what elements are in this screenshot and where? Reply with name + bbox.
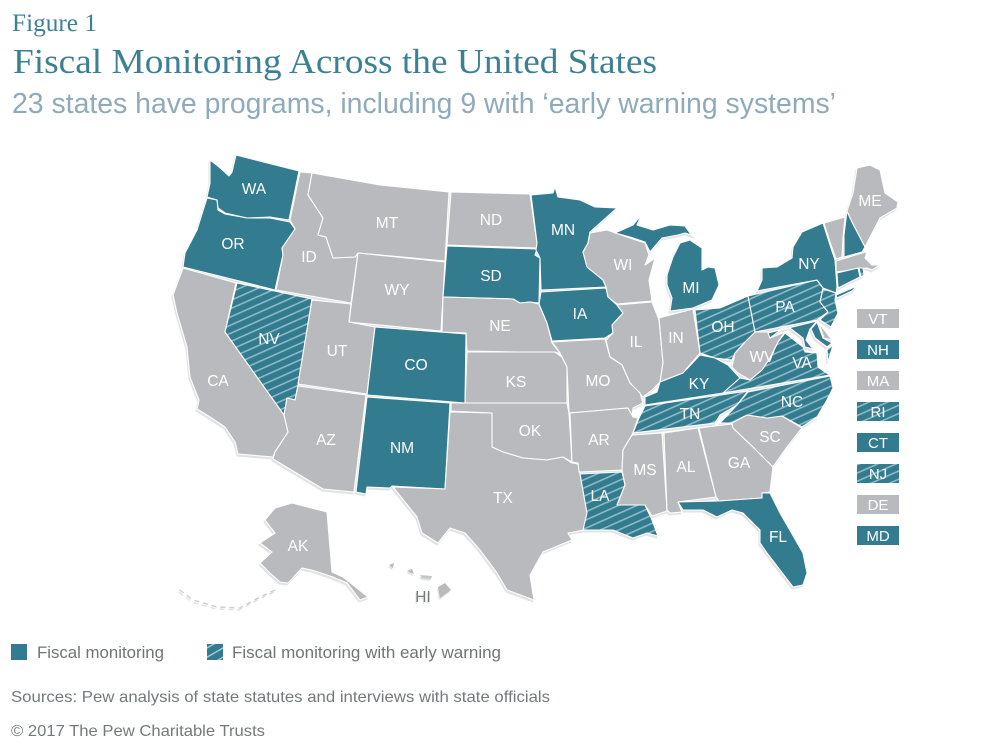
state: GA: GA [728, 455, 751, 472]
key: CT: CT [868, 435, 888, 452]
state: ME: ME [858, 193, 882, 210]
map of the United States [173, 155, 898, 608]
subtitle: 23 states have programs, including 9 with ‘early warning systems’ [12, 88, 836, 120]
state: KY: KY [689, 376, 709, 393]
state: AZ [273, 386, 366, 492]
state: AL [664, 428, 716, 513]
state: FL [678, 493, 807, 587]
state: HI: HI [415, 589, 431, 606]
state: MO [552, 339, 643, 418]
legend label: early warning: Fiscal monitoring with early warning [232, 644, 501, 662]
state: NV: NV [258, 331, 280, 348]
key: NJ: NJ [869, 466, 887, 483]
state: WA: WA [242, 181, 267, 198]
state: FL: FL [769, 529, 787, 546]
state: AK: AK [288, 538, 309, 555]
state: CA: CA [207, 373, 229, 390]
state: MS [617, 433, 667, 516]
state: OH: OH [711, 319, 735, 336]
sources note: Sources: Pew analysis of state statutes and interviews with state officials [11, 689, 550, 706]
state: ID: ID [301, 249, 317, 266]
state: ND [447, 192, 537, 248]
state: NM: NM [390, 440, 414, 457]
state: NC: NC [781, 394, 803, 411]
legend label: fiscal monitoring: Fiscal monitoring [37, 644, 164, 662]
state: KS [465, 352, 567, 403]
copyright: © 2017 The Pew Charitable Trusts [11, 723, 265, 740]
state: TN: TN [680, 406, 700, 423]
state: NM [356, 397, 450, 494]
key: RI: RI [870, 404, 886, 421]
state: PA: PA [775, 299, 795, 316]
state: IL: IL [630, 334, 643, 351]
state: VT [824, 217, 845, 259]
state: GA [699, 424, 773, 501]
state: NY: NY [798, 256, 820, 273]
state: WV: WV [750, 349, 775, 366]
state: MN: MN [551, 222, 575, 239]
state: NE [442, 297, 560, 353]
key: MD [857, 526, 899, 545]
state: WI: WI [614, 257, 632, 274]
state: WA [207, 155, 299, 220]
state: CO: CO [404, 357, 428, 374]
key: VT [857, 309, 899, 328]
state: KY [645, 355, 740, 405]
state: SC: SC [759, 429, 781, 446]
key: DE [857, 495, 899, 514]
state: TN [633, 391, 748, 433]
state: NJ [820, 289, 838, 327]
key: VT: VT [868, 311, 888, 328]
state: SD [443, 246, 540, 303]
state: VA: VA [792, 355, 812, 372]
key: NH [857, 340, 899, 359]
state: NH [844, 211, 865, 257]
state: RI [859, 268, 864, 277]
state: VA [723, 333, 830, 393]
state: SD: SD [480, 268, 502, 285]
state: MA [836, 252, 880, 272]
state: AL: AL [677, 459, 696, 476]
state: KS: KS [506, 374, 526, 391]
state: MD [768, 321, 832, 349]
state: AR: AR [588, 432, 610, 449]
legend swatch: fiscal monitoring [11, 644, 27, 660]
state: HI [389, 563, 451, 606]
key: MA [857, 371, 899, 390]
state: LA: LA [591, 488, 610, 505]
figure label: Figure 1 [12, 10, 97, 37]
state: MS: MS [633, 462, 657, 479]
state: MO: MO [586, 373, 610, 390]
state: MN [531, 187, 617, 290]
state: AZ: AZ [316, 432, 336, 449]
state: NC [720, 376, 833, 427]
Virginia eastern shore [827, 345, 833, 362]
state: NV [225, 283, 312, 415]
state: NE: NE [489, 318, 511, 335]
key: MD: MD [866, 528, 890, 545]
state: NY [757, 223, 837, 293]
state: UT: UT [327, 343, 348, 360]
state: TX [393, 412, 587, 600]
legend [11, 644, 501, 662]
state: MI [615, 214, 719, 311]
state: CO [367, 327, 466, 403]
state: DE [819, 323, 832, 340]
state: CA [173, 268, 288, 457]
state: ND: ND [480, 212, 502, 229]
state: UT [298, 300, 375, 394]
state: IN: IN [668, 330, 684, 347]
Long Island [836, 286, 857, 298]
key: NJ [857, 464, 899, 483]
key: CT [857, 433, 899, 452]
title: Fiscal Monitoring Across the United States [13, 42, 657, 81]
state: SC [732, 415, 802, 467]
state: WI [583, 230, 655, 304]
state: AK [177, 503, 368, 608]
key: small northeastern states [857, 309, 899, 545]
state: WY: WY [385, 282, 409, 299]
state: OR [183, 198, 295, 290]
state: MI: MI [682, 280, 700, 297]
state: TX: TX [493, 490, 514, 507]
state: IA: IA [573, 306, 588, 323]
state: CT [837, 268, 860, 288]
key: DE: DE [868, 497, 888, 514]
state: PA [748, 280, 828, 332]
legend swatch: early warning [207, 644, 223, 660]
state: OK: OK [519, 423, 542, 440]
key: MA: MA [867, 373, 889, 390]
key: RI [857, 402, 899, 421]
state: AR [570, 408, 638, 472]
state: WV [732, 332, 785, 380]
state: IA [539, 288, 623, 341]
state: ME [847, 165, 898, 247]
state: IN [659, 309, 700, 382]
state: WY [349, 253, 445, 331]
state: MT [308, 173, 449, 261]
state: LA [580, 472, 658, 538]
state: OK [451, 403, 572, 462]
state: OR: OR [221, 236, 245, 253]
state: IL [606, 302, 663, 397]
state: ID [276, 172, 358, 303]
key: NH: NH [867, 342, 889, 359]
state: MT: MT [376, 215, 399, 232]
state: OH [695, 296, 755, 360]
